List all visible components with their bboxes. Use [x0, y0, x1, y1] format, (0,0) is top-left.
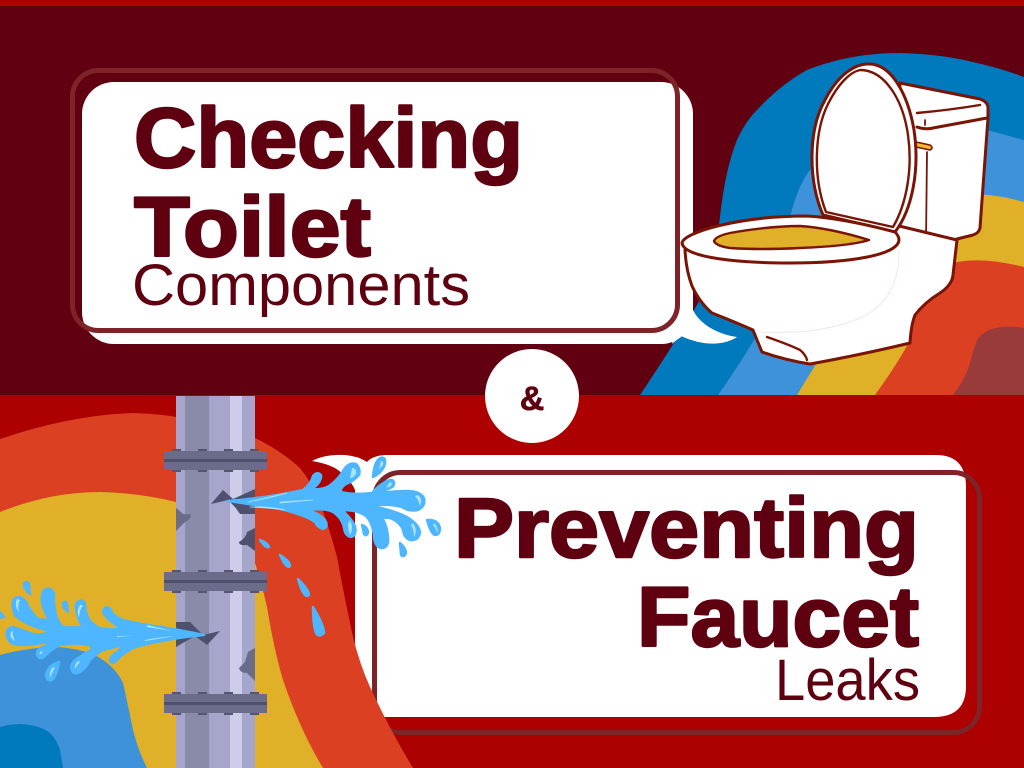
- pipe cracks: [176, 489, 255, 681]
- illustration: leaking pipe: [164, 396, 267, 768]
- top rainbow waves: [640, 53, 1024, 395]
- subheading: Components: Components: [132, 253, 470, 318]
- illustration: toilet: [682, 64, 988, 364]
- heading: Checking: Checking: [134, 91, 523, 185]
- pipe body: [176, 396, 255, 768]
- toilet lid: [812, 64, 916, 232]
- heading: Faucet: Faucet: [637, 570, 919, 664]
- ampersand badge: [485, 349, 579, 443]
- water highlights: [10, 599, 175, 678]
- water spray: right jet: [228, 458, 440, 636]
- bottom rainbow waves: [0, 413, 413, 768]
- water highlights: [248, 461, 438, 537]
- pipe clamps: [164, 449, 267, 715]
- heading: Toilet: Toilet: [134, 180, 371, 274]
- subheading: Leaks: Leaks: [775, 648, 920, 713]
- water spray: left jet: [0, 582, 204, 680]
- panel: Checking Toilet Components: [72, 70, 737, 344]
- toilet tank: [895, 83, 988, 245]
- toilet seat: [682, 216, 899, 263]
- flush handle: [916, 142, 932, 150]
- heading: Preventing: Preventing: [454, 481, 919, 575]
- toilet bowl: [685, 225, 957, 364]
- ampersand badge: &: [520, 380, 544, 418]
- panel: top dark maroon background: [0, 6, 1024, 395]
- seat opening: [714, 226, 869, 249]
- panel: Preventing Faucet Leaks: [312, 455, 980, 732]
